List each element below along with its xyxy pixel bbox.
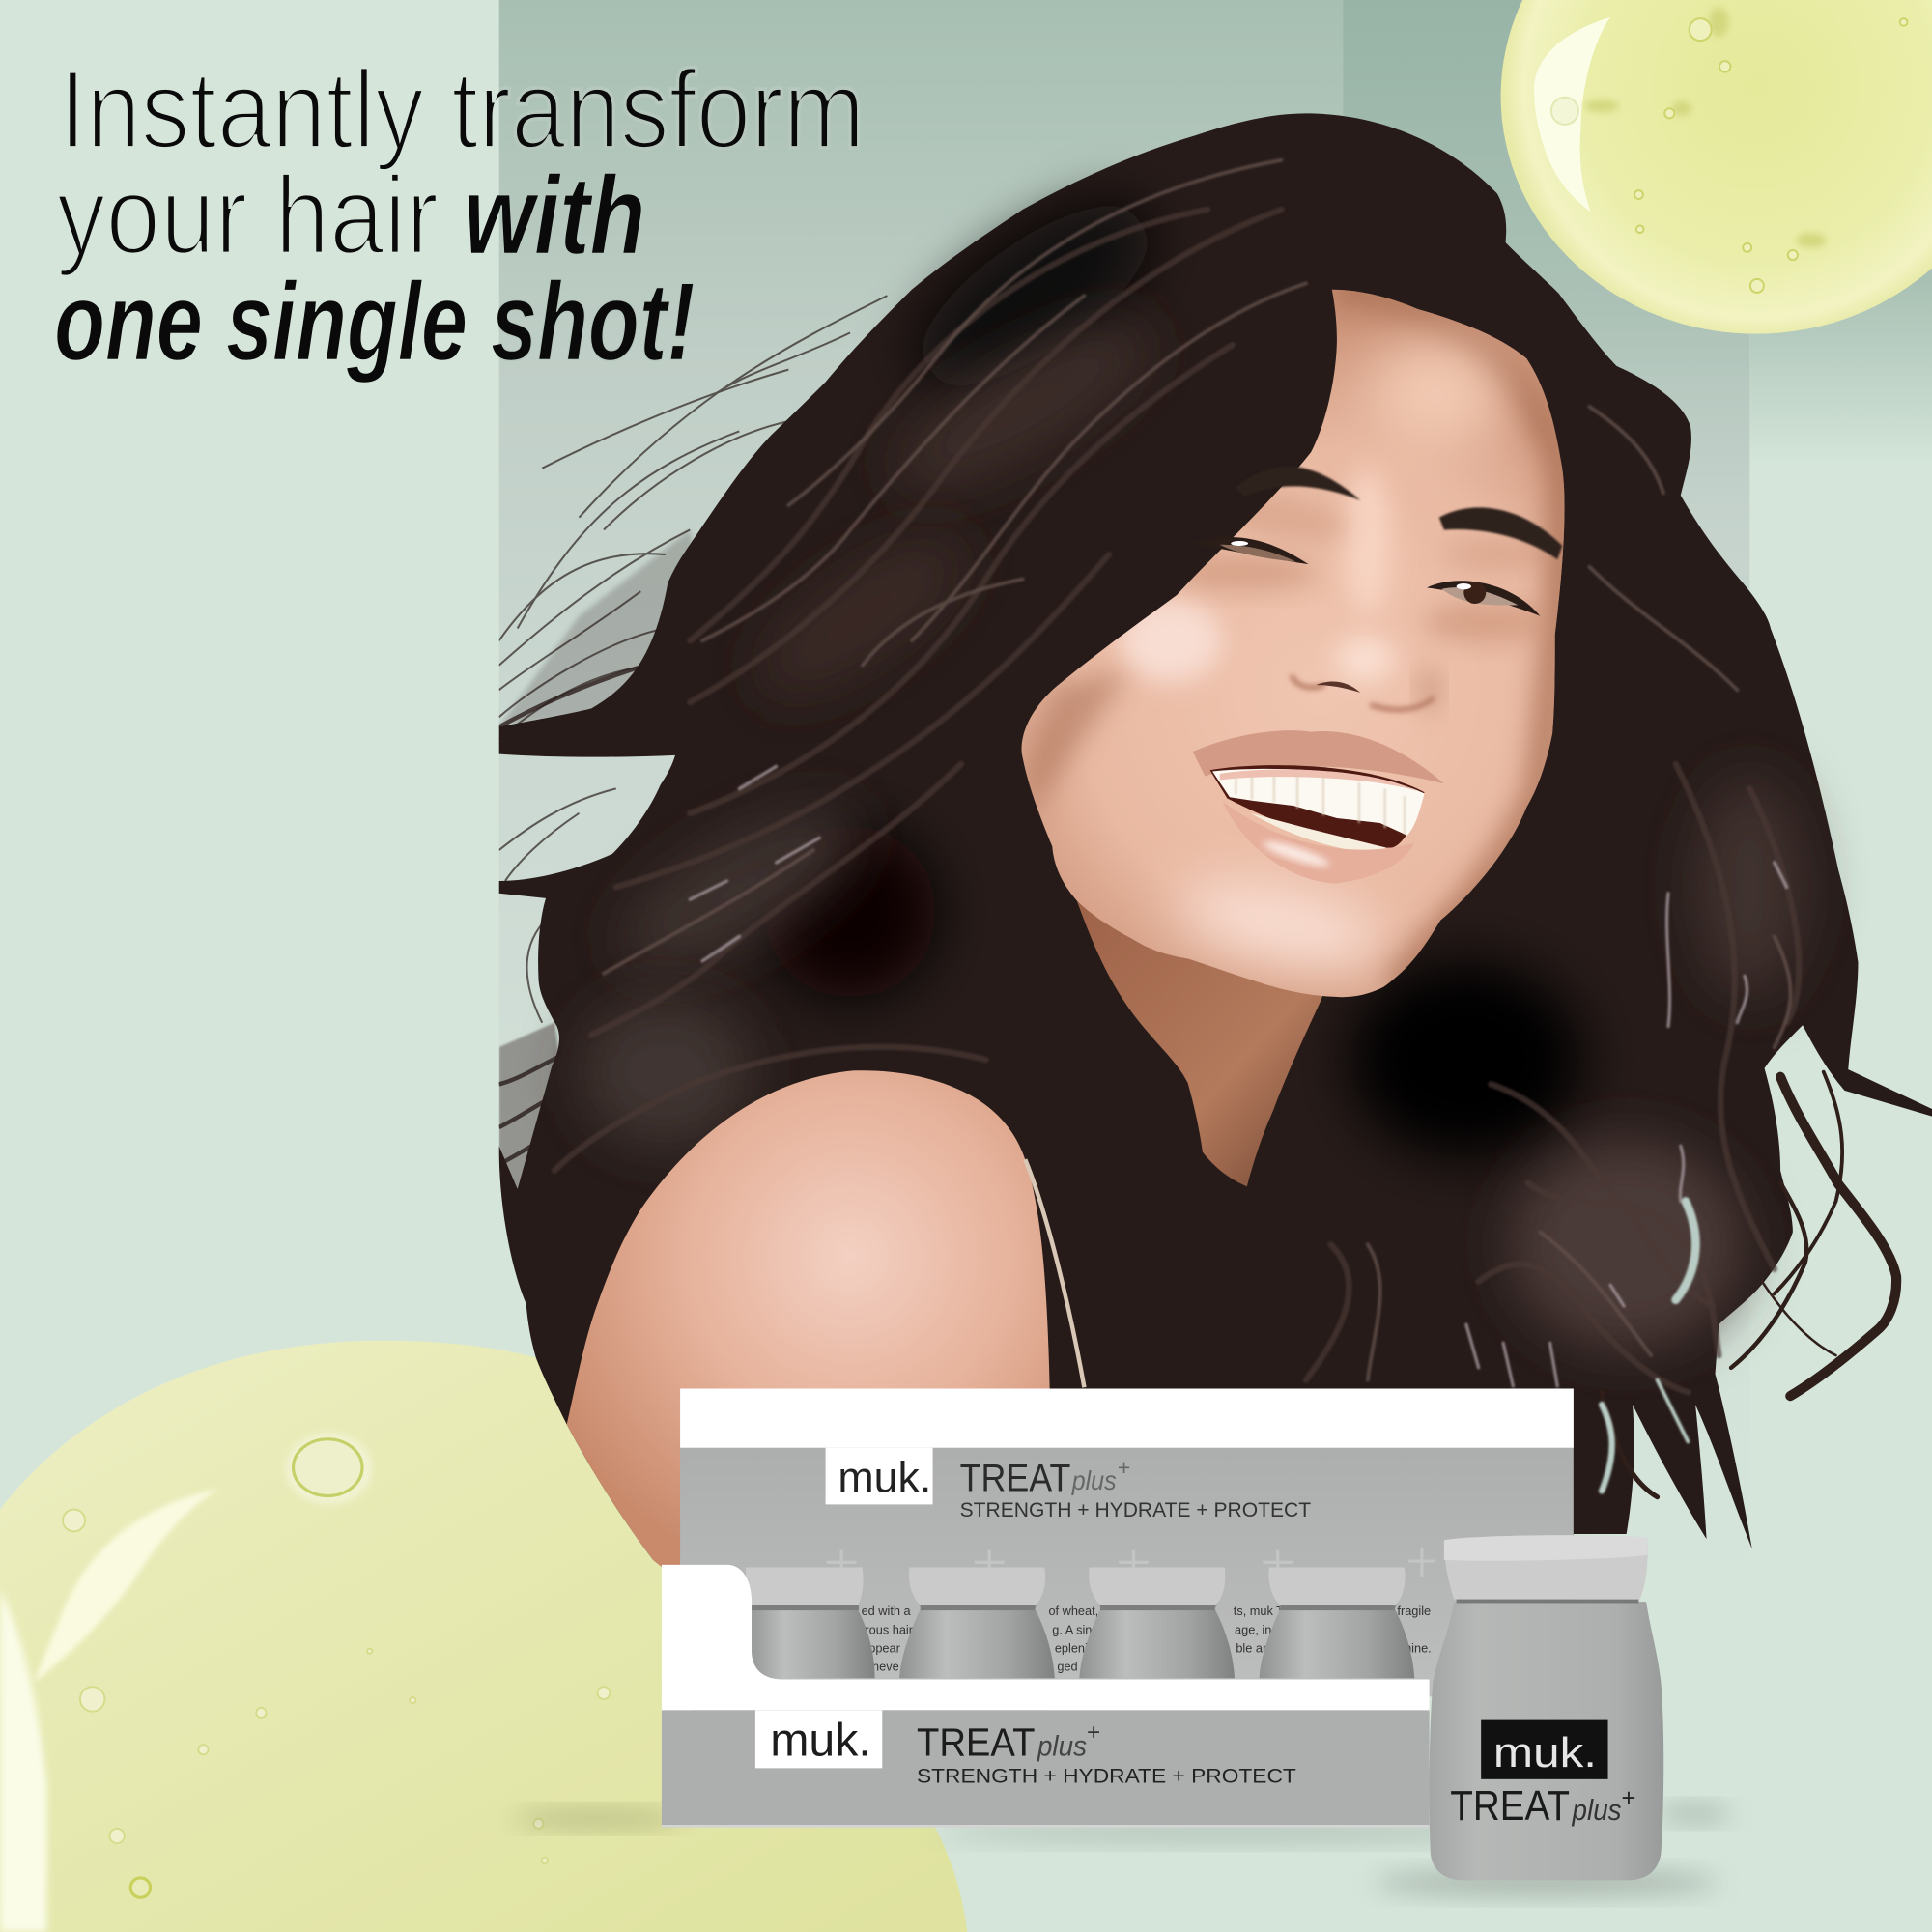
upper teeth	[1212, 769, 1424, 836]
hair glints	[690, 766, 1786, 1386]
box back text fragments: ppear	[868, 1640, 901, 1655]
plus marks	[827, 1548, 1435, 1579]
box front panel	[662, 1710, 1430, 1828]
oil drop: top right	[1501, 0, 1932, 334]
vial body	[1430, 1602, 1663, 1880]
neck	[1077, 900, 1336, 1186]
vial cap	[1444, 1535, 1648, 1600]
wispy hair left	[499, 296, 887, 1306]
left eyebrow	[1235, 467, 1360, 500]
box back text fragments: ged d	[1057, 1660, 1088, 1674]
back product name: +	[1118, 1455, 1130, 1480]
back tagline: STRENGTH + HYDRATE + PROTECT	[960, 1499, 1311, 1521]
box back panel	[680, 1389, 1574, 1696]
front product name	[917, 1719, 1100, 1765]
title line 1: Instantly transform	[59, 48, 865, 172]
mouth interior	[1210, 765, 1424, 848]
dress strap	[1025, 1159, 1084, 1387]
photo panel	[498, 0, 1750, 1423]
shoulder	[542, 1070, 1050, 1725]
hair: tonal patches	[579, 173, 1805, 1350]
shade right of panel	[1749, 234, 1932, 469]
lower lip	[1222, 801, 1414, 884]
box back text fragments: hine.	[1405, 1640, 1432, 1655]
title	[54, 48, 865, 384]
box back text fragments: ed with a	[862, 1604, 912, 1618]
face shading	[1025, 290, 1563, 985]
bubbles: small	[63, 1509, 610, 1897]
vial 3	[1079, 1567, 1235, 1678]
label product name: +	[1622, 1785, 1635, 1812]
box back text fragments	[862, 1604, 1432, 1674]
box white header	[680, 1389, 1574, 1448]
large vial	[1430, 1535, 1663, 1880]
title line 2 light: your hair	[57, 155, 439, 278]
front logo: muk.	[770, 1715, 871, 1767]
tray white frame	[662, 1565, 1430, 1710]
front tagline: STRENGTH + HYDRATE + PROTECT	[917, 1764, 1296, 1788]
back product name	[960, 1455, 1130, 1499]
box back text fragments: ble an	[1236, 1640, 1269, 1655]
lower teeth	[1251, 813, 1386, 853]
label logo: muk.	[1493, 1730, 1597, 1776]
bubbles	[1551, 18, 1907, 293]
box back text fragments: fragile	[1397, 1604, 1431, 1618]
neck line	[1457, 1600, 1638, 1603]
label product name: TREAT	[1450, 1783, 1570, 1830]
vial 4	[1260, 1567, 1414, 1678]
oil drop: bottom left	[0, 1341, 967, 1932]
box back text fragments: neve	[872, 1660, 899, 1674]
upper lip	[1193, 730, 1444, 783]
drop dark spots	[1584, 8, 1826, 247]
hair: main mass	[499, 113, 1932, 1688]
back logo: muk.	[838, 1455, 931, 1502]
box front bottom rim	[662, 1825, 1430, 1828]
right eyebrow	[1439, 507, 1562, 559]
cap top band	[1444, 1535, 1647, 1561]
left eye	[1219, 537, 1308, 564]
title line 3 bold: one single shot!	[54, 260, 695, 384]
label product name: plus	[1572, 1794, 1622, 1827]
box back text fragments: rous hair	[865, 1622, 914, 1636]
product box	[662, 1389, 1574, 1828]
bubble: large	[286, 1433, 372, 1504]
vial 1	[746, 1567, 875, 1678]
box back text fragments: g. A single	[1052, 1622, 1108, 1636]
gaps in hair	[1602, 1202, 1695, 1491]
woman portrait	[499, 113, 1932, 1725]
tooth gaps	[1236, 775, 1405, 835]
drop left glow	[0, 1589, 46, 1932]
drop crescent highlight	[1534, 17, 1610, 212]
hair: highlights	[554, 160, 1799, 1392]
box back text fragments: ts, muk Tr	[1234, 1604, 1289, 1618]
nose	[1292, 637, 1435, 710]
drop crescent highlight	[35, 1489, 219, 1682]
product shadows	[511, 1805, 1731, 1895]
back product name: TREAT	[960, 1457, 1070, 1499]
title line 2 bold: with	[464, 155, 645, 278]
face	[1022, 290, 1565, 997]
front product name: TREAT	[917, 1720, 1035, 1765]
gum line	[1220, 770, 1417, 791]
box back text fragments: eplenis	[1055, 1640, 1094, 1655]
S-curve hair locks	[1602, 1072, 1896, 1497]
front product name: +	[1087, 1719, 1100, 1746]
vials	[746, 1567, 1414, 1678]
mouth	[1193, 730, 1444, 884]
box back text fragments: age, incre	[1235, 1622, 1289, 1636]
right eye	[1427, 581, 1540, 616]
box back text fragments: of wheat, c	[1048, 1604, 1109, 1618]
black label	[1481, 1720, 1608, 1779]
back product name: plus	[1071, 1465, 1117, 1495]
front product name: plus	[1037, 1731, 1087, 1763]
vial 2	[899, 1567, 1055, 1678]
